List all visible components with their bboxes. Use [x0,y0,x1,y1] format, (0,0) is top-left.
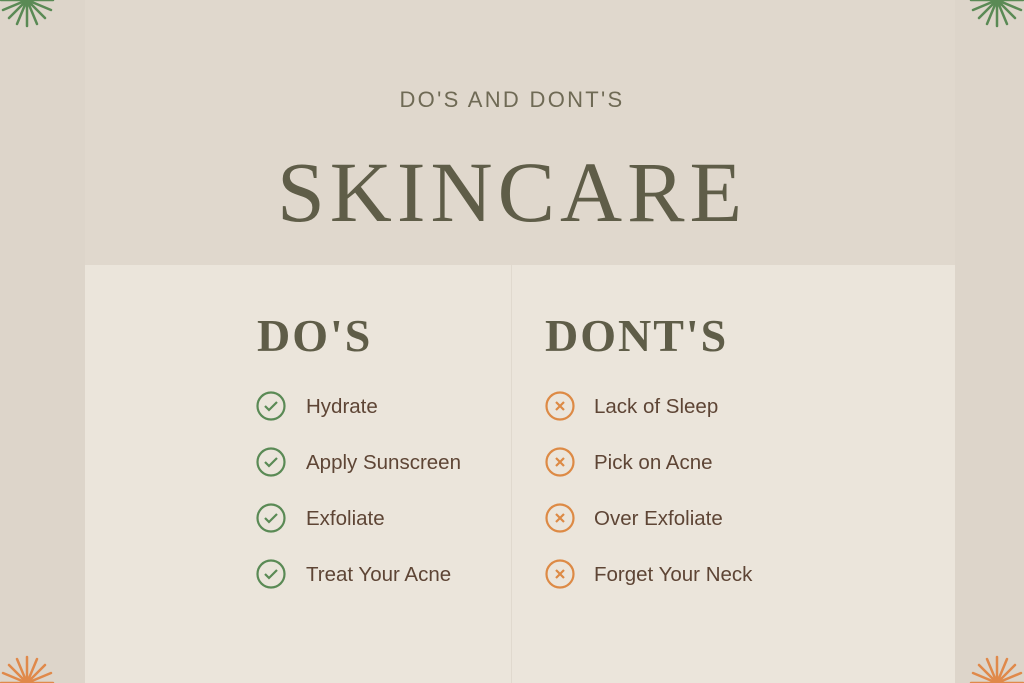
list: dont's: Over Exfoliate [594,507,723,530]
list: dont's: Forget Your Neck [594,563,752,586]
list: do's: Apply Sunscreen [306,451,461,474]
top band [85,0,955,265]
list: do's [256,391,461,589]
list: dont's: Lack of Sleep [594,395,718,418]
subtitle: DO'S AND DONT'S [399,87,625,112]
list: do's: Treat Your Acne [306,563,451,586]
list: do's: Hydrate [306,395,378,418]
title: SKINCARE [277,144,747,240]
panel: content [85,265,955,683]
list: dont's [545,391,752,589]
heading: do's: DO'S [257,310,372,361]
list: dont's: Pick on Acne [594,451,713,474]
heading: dont's: DONT'S [545,310,728,361]
list: do's: Exfoliate [306,507,385,530]
